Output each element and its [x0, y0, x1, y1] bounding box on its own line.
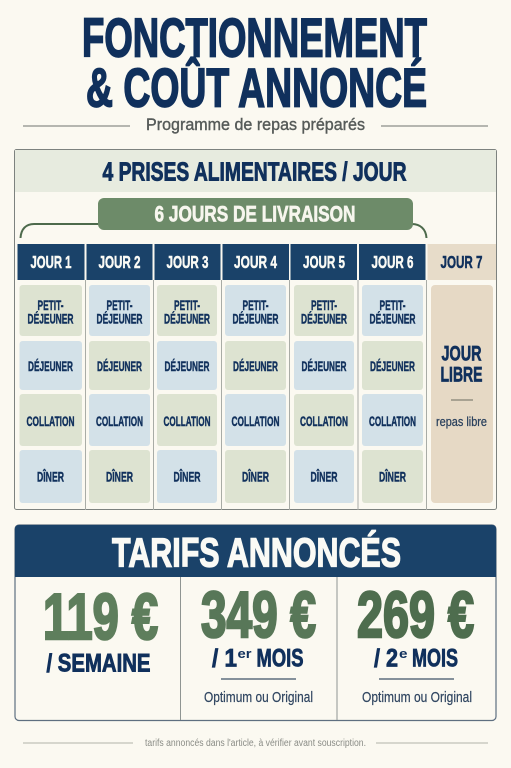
price: 269 euros deuxieme mois: e [399, 646, 408, 661]
price: 269 euros deuxieme mois [357, 578, 474, 706]
badge: 6 jours de livraison: 6 JOURS DE LIVRAISON [154, 202, 356, 226]
column: jour 4: COLLATION [232, 414, 280, 429]
column: jour 3: JOUR 3 [166, 252, 209, 272]
price: 349 euros premier mois: / 1 [212, 644, 237, 672]
footer note: tarifs annoncés dans l'article, à vérifier avant souscription. [145, 738, 366, 749]
column: jour 5: PETIT- [311, 298, 337, 313]
column: jour 1: JOUR 1 [30, 252, 72, 272]
column: jour 2: JOUR 2 [98, 252, 140, 272]
price: 349 euros premier mois: 349 € [201, 578, 316, 651]
tarifs heading: TARIFS ANNONCÉS [112, 529, 401, 575]
column: jour 3: DÉJEUNER [164, 358, 210, 374]
price: 119 euros par semaine: / SEMAINE [46, 650, 150, 678]
subtitle: Programme de repas préparés [146, 115, 365, 134]
column: jour 5: COLLATION [300, 414, 348, 429]
column: jour 2: PETIT- [106, 298, 133, 313]
panel heading band: 4 PRISES ALIMENTAIRES / JOUR [102, 156, 407, 186]
column: jour 2: DÎNER [106, 468, 133, 484]
price: 269 euros deuxieme mois: MOIS [412, 644, 458, 672]
column: jour 4: DÉJEUNER [232, 310, 279, 326]
column: jour 4: JOUR 4 [234, 252, 277, 272]
column: jour 4 [222, 244, 289, 503]
column: jour 3: DÎNER [174, 468, 201, 484]
column: jour 6: JOUR 6 [372, 252, 414, 272]
column: jour 4: DÉJEUNER [233, 358, 278, 374]
column: jour 2: DÉJEUNER [97, 358, 142, 374]
price dividers [180, 577, 337, 720]
column: jour 5: DÉJEUNER [302, 358, 347, 374]
column: jour 7: LIBRE [440, 364, 482, 387]
bracket: delivery days [20, 224, 426, 238]
price: 269 euros deuxieme mois: Optimum ou Original [362, 690, 472, 706]
price: 119 euros par semaine: 119 € [43, 580, 158, 653]
column: jour 1 [18, 244, 84, 503]
column: jour 6: DÎNER [379, 468, 406, 484]
column: jour 5: DÎNER [310, 468, 338, 484]
column: jour 2: DÉJEUNER [96, 310, 143, 326]
column: jour 7: JOUR [442, 343, 482, 366]
column: jour 2: COLLATION [96, 414, 143, 429]
price: 349 euros premier mois: er [238, 646, 252, 661]
panel: tarifs [15, 525, 496, 720]
column: jour 4: DÎNER [242, 468, 269, 484]
column: jour 3: PETIT- [174, 298, 200, 313]
column: jour 3: COLLATION [164, 414, 211, 429]
column: jour 5 [290, 244, 357, 503]
panel heading band [15, 150, 496, 192]
column: jour 3 [154, 244, 220, 503]
column: jour 6: DÉJEUNER [370, 310, 416, 326]
column: jour 6 [359, 244, 426, 503]
column: jour 5: DÉJEUNER [301, 310, 347, 326]
price: 269 euros deuxieme mois: / 2 [374, 644, 398, 672]
panel: weekly schedule [14, 150, 496, 510]
price: 349 euros premier mois: MOIS [256, 644, 304, 672]
column: jour 7: repas libre [436, 415, 487, 429]
column: jour 7 [428, 244, 496, 503]
column: jour 2 [86, 244, 152, 503]
column: jour 1: DÎNER [37, 468, 64, 484]
column: jour 4: PETIT- [242, 298, 269, 313]
price: 349 euros premier mois: Optimum ou Original [204, 690, 313, 706]
column: jour 7: JOUR 7 [440, 252, 482, 272]
column: jour 1: DÉJEUNER [28, 358, 73, 374]
badge: 6 jours de livraison [98, 198, 413, 230]
title [82, 7, 427, 118]
price: 349 euros premier mois [201, 578, 316, 706]
column: jour 1: DÉJEUNER [28, 310, 74, 326]
column: jour 1: COLLATION [26, 414, 75, 429]
price: 119 euros par semaine [43, 580, 158, 678]
column: jour 5: JOUR 5 [303, 252, 345, 272]
column: jour 6: COLLATION [369, 414, 416, 429]
column dividers [86, 280, 426, 510]
column: jour 6: DÉJEUNER [370, 358, 415, 374]
column: jour 1: PETIT- [38, 298, 64, 313]
column: jour 3: DÉJEUNER [164, 310, 210, 326]
column: jour 6: PETIT- [380, 298, 406, 313]
